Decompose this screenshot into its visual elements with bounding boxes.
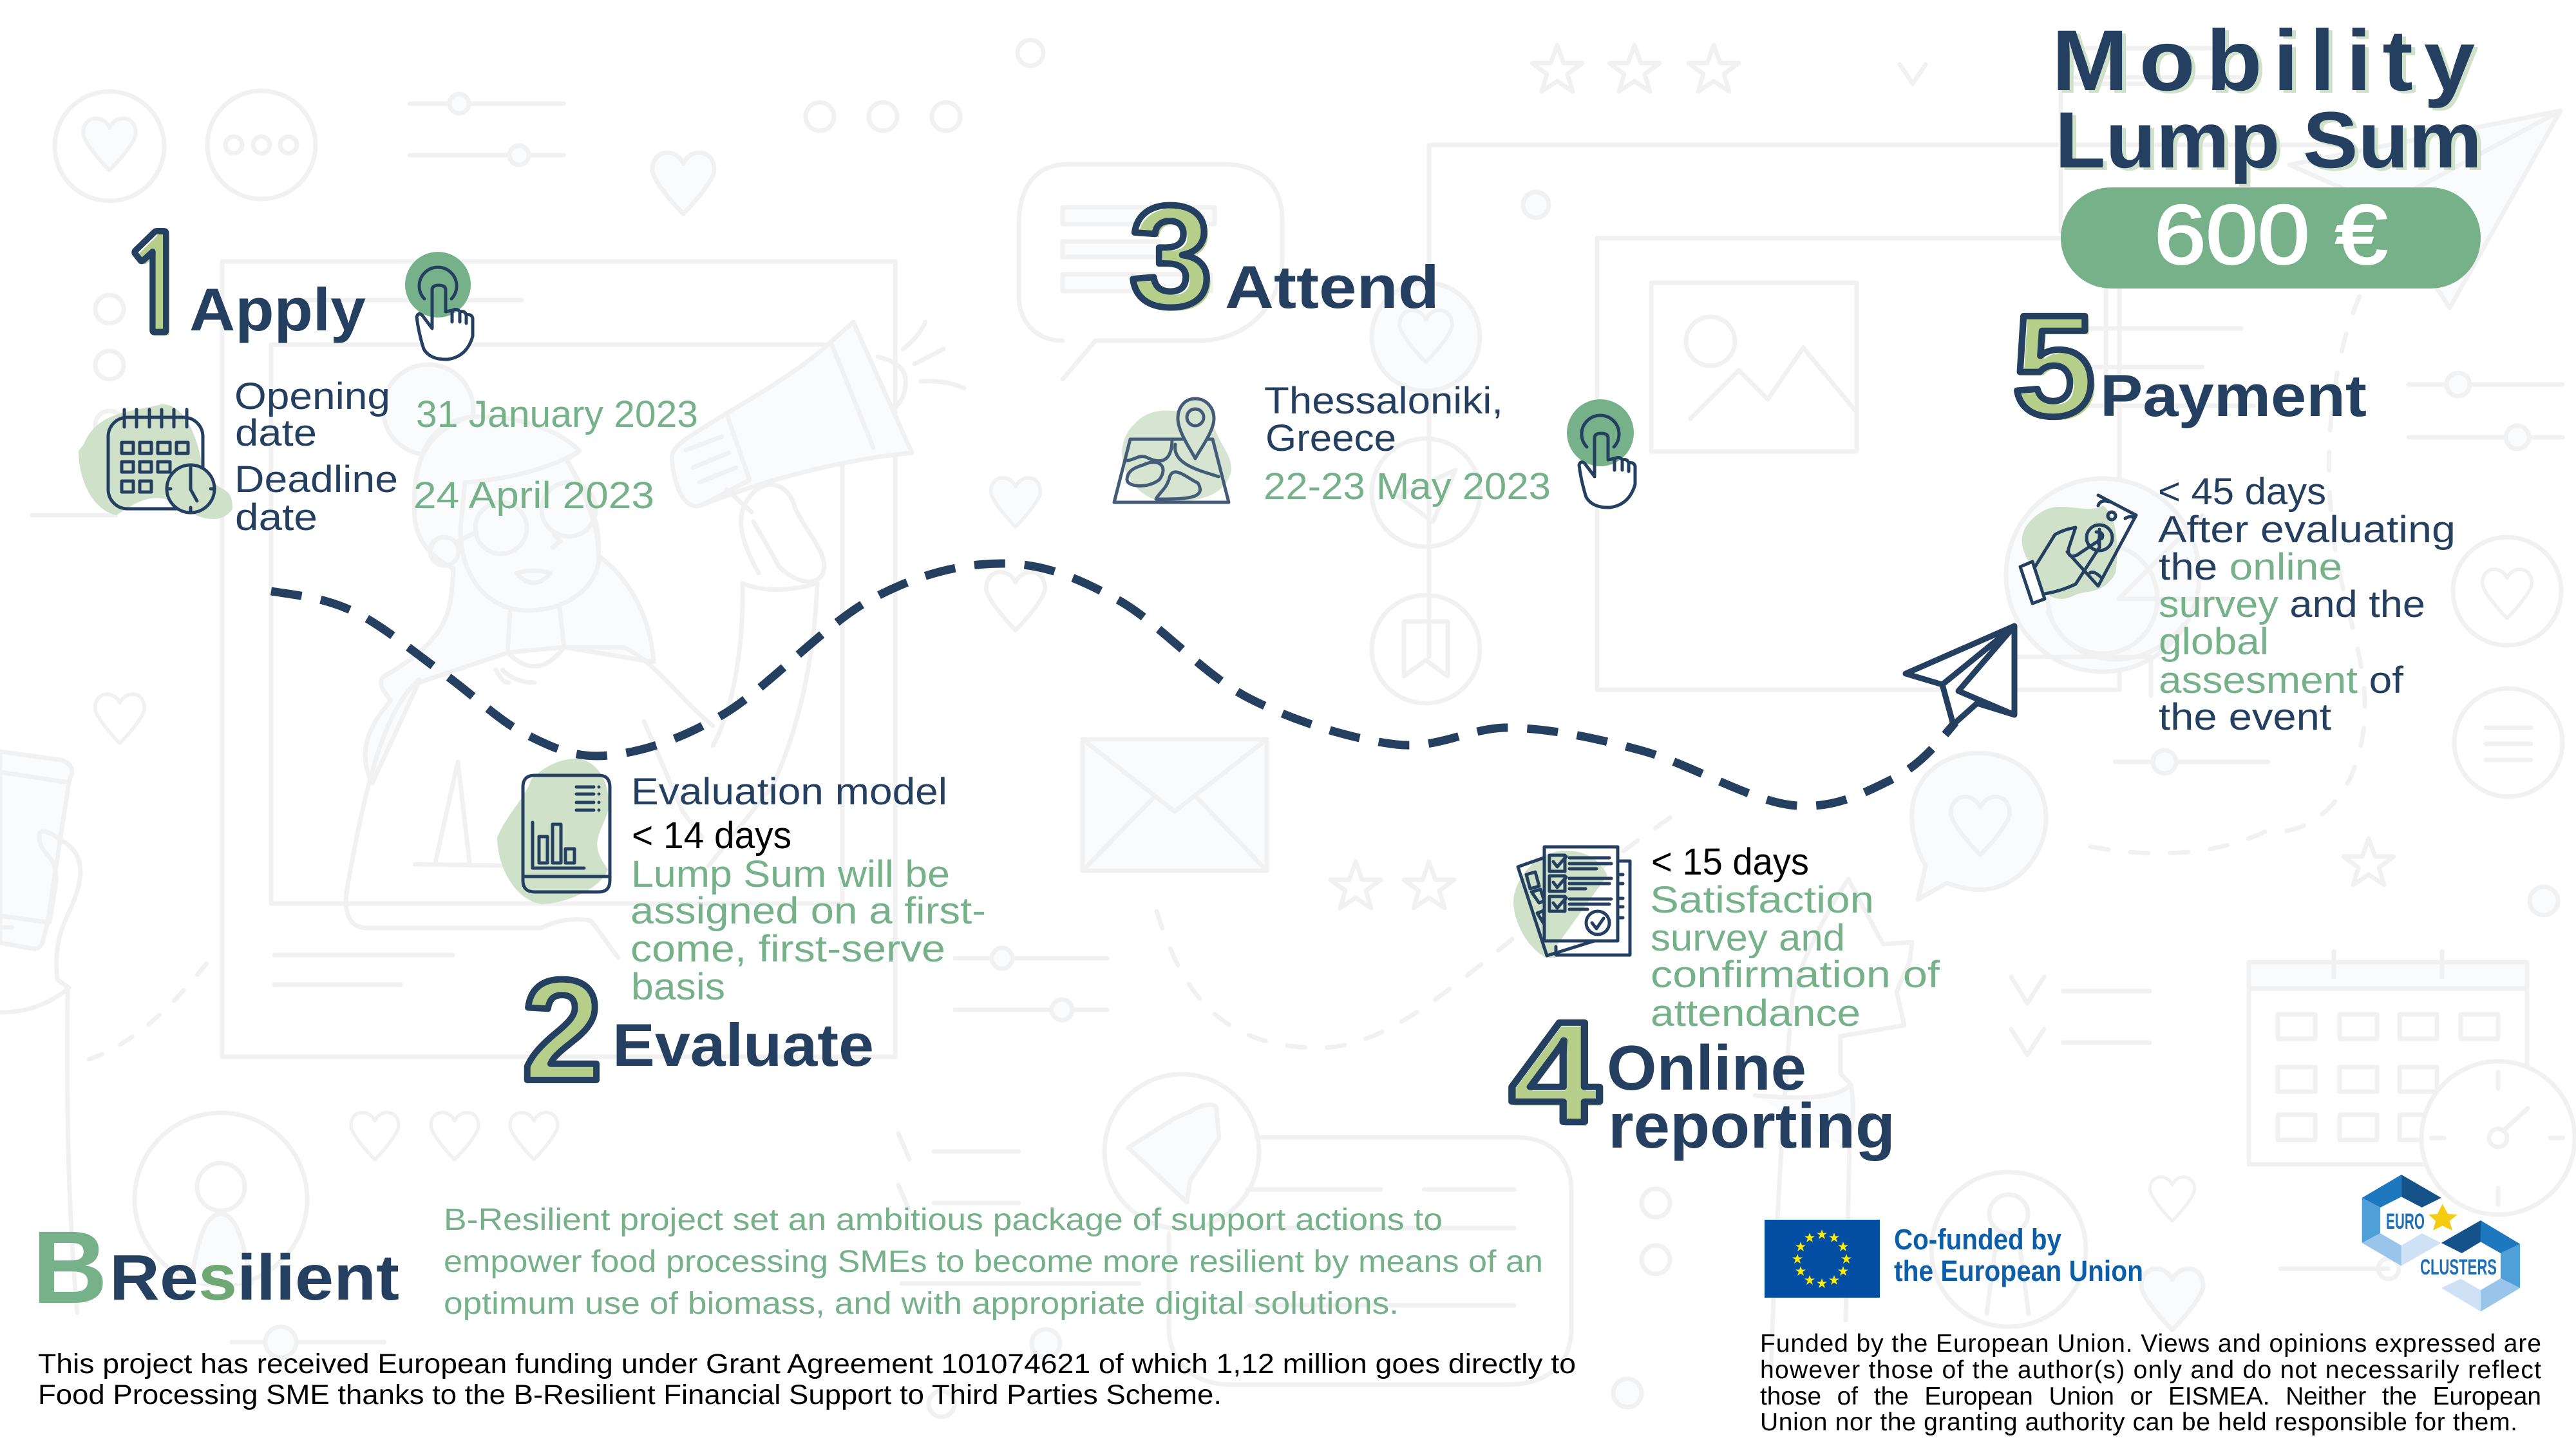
price badge: 600 € bbox=[2061, 187, 2481, 289]
number 3: 3 bbox=[1133, 179, 1216, 340]
number 5: 5 bbox=[2012, 285, 2095, 446]
bubble with heart bbox=[1912, 753, 2046, 900]
text: EU disclaimer bbox=[1760, 1330, 2541, 1436]
icon: hand with banknote bbox=[2020, 495, 2136, 603]
text: deadline date: date bbox=[235, 497, 317, 538]
text: under 45 days and conditions: global bbox=[2159, 621, 2269, 663]
logo: B-Resilient: Resilient bbox=[109, 1242, 399, 1314]
icon: touch button bbox=[1567, 399, 1635, 507]
icon: calendar and clock bbox=[79, 404, 232, 519]
text: funding statement: Food Processing SME thanks to the B-Resilient Financial Support to Third Parties Scheme. bbox=[38, 1379, 1222, 1410]
title: Mobility Lump Sum: Lump Sum bbox=[2055, 96, 2482, 185]
icon: paper plane bbox=[1906, 626, 2014, 724]
icon: touch button bbox=[405, 252, 473, 359]
title: Mobility Lump Sum: Mobility bbox=[2056, 15, 2490, 111]
heading: Evaluate: Evaluate bbox=[612, 1011, 874, 1079]
text: lump sum assignment: assigned on a first- bbox=[630, 890, 986, 932]
top chat bbox=[1063, 207, 1215, 291]
panel: step 2 Evaluate bbox=[497, 759, 986, 1113]
text: location bbox=[1264, 380, 1503, 459]
text: deadline date bbox=[234, 459, 398, 538]
text: EU disclaimer: Union nor the granting authority can be held responsible for them. bbox=[1760, 1408, 2517, 1436]
panel: step 1 Apply bbox=[79, 220, 698, 538]
number 3: 3 bbox=[1130, 176, 1212, 337]
text: under 15 days: < 15 days bbox=[1651, 841, 1809, 883]
text: EU disclaimer: those of the European Union or EISMEA. Neither the European bbox=[1760, 1383, 2541, 1410]
panel: step 3 Attend bbox=[1114, 176, 1635, 507]
logo: Euroclusters: CLUSTERS bbox=[2420, 1255, 2497, 1280]
text: satisfaction survey bbox=[1650, 879, 1940, 1034]
heading: Online reporting: Online bbox=[1607, 1032, 1806, 1103]
text: under 45 days and conditions: survey and the bbox=[2159, 583, 2425, 625]
person bun and hair bbox=[383, 365, 473, 455]
text: deadline date: Deadline bbox=[234, 459, 398, 500]
logo: EU flag co-funded bbox=[1765, 1220, 2143, 1298]
megaphone bbox=[672, 322, 912, 506]
number 5: 5 bbox=[2016, 289, 2099, 450]
dashed journey path bbox=[271, 564, 1955, 806]
text: project description bbox=[444, 1203, 1543, 1321]
text: EU disclaimer: Funded by the European Union. Views and opinions expressed are bbox=[1760, 1330, 2541, 1358]
logo: Euroclusters bbox=[2362, 1175, 2520, 1312]
logo: EU flag co-funded: Co-funded by bbox=[1894, 1223, 2061, 1256]
date: 24 April 2023: 24 April 2023 bbox=[413, 475, 654, 516]
logo: B-Resilient bbox=[32, 1209, 399, 1325]
text: under 45 days and conditions bbox=[2158, 471, 2456, 738]
logo: B-Resilient: B bbox=[32, 1209, 108, 1325]
title: Mobility Lump Sum: Mobility bbox=[2052, 13, 2486, 109]
number 2: 2 bbox=[522, 950, 602, 1111]
number 1: 1 bbox=[118, 220, 194, 352]
heading: Online reporting bbox=[1607, 1032, 1895, 1161]
text: project description: optimum use of biomass, and with appropriate digital solutions. bbox=[444, 1287, 1399, 1321]
text: funding statement bbox=[38, 1349, 1576, 1410]
calendar bbox=[2249, 962, 2527, 989]
text: evaluation model: Evaluation model bbox=[631, 771, 947, 813]
heading: Payment: Payment bbox=[2100, 363, 2367, 429]
icon: report book bbox=[497, 759, 610, 904]
number 4: 4 bbox=[1510, 992, 1600, 1153]
text: EU disclaimer: however those of the author(s) only and do not necessarily reflect bbox=[1760, 1356, 2541, 1384]
price badge: 600 €: 600 € bbox=[2154, 187, 2387, 281]
number 4: 4 bbox=[1511, 996, 1602, 1157]
text: under 45 days and conditions: After evaluating bbox=[2158, 509, 2456, 551]
text: location: Thessaloniki, bbox=[1264, 380, 1503, 422]
text: satisfaction survey: attendance bbox=[1651, 992, 1861, 1034]
bell and chat bbox=[1104, 1074, 1259, 1229]
text: funding statement: This project has received European funding under Grant Agreement 101074621 of which 1,12 million goes directly to bbox=[38, 1349, 1576, 1379]
text: opening date: Opening bbox=[234, 375, 390, 417]
heading: Apply: Apply bbox=[189, 276, 366, 343]
panel: step 5 Payment bbox=[2012, 285, 2456, 738]
text: opening date: date bbox=[235, 412, 317, 454]
logo: Euroclusters: EURO bbox=[2386, 1209, 2425, 1234]
user circle and hearts bbox=[135, 1113, 307, 1285]
text: opening date bbox=[234, 375, 390, 454]
text: under 45 days and conditions: the event bbox=[2159, 696, 2331, 738]
heading: Attend: Attend bbox=[1225, 253, 1439, 321]
title: Mobility Lump Sum bbox=[2052, 13, 2490, 187]
text: under 45 days and conditions: assesment of bbox=[2159, 659, 2404, 701]
text: satisfaction survey: survey and bbox=[1651, 917, 1845, 959]
text: under 45 days and conditions: < 45 days bbox=[2158, 471, 2326, 513]
thumbs hand bbox=[1771, 879, 1912, 1372]
check lists bbox=[2011, 977, 2150, 1055]
date: 22-23 May 2023: 22-23 May 2023 bbox=[1264, 466, 1551, 507]
number 1: 1 bbox=[122, 223, 198, 355]
text: lump sum assignment: Lump Sum will be bbox=[631, 853, 950, 895]
title: Mobility Lump Sum: Lump Sum bbox=[2059, 99, 2486, 187]
text: under 14 days: < 14 days bbox=[632, 815, 791, 857]
text: under 45 days and conditions: the online bbox=[2159, 546, 2342, 588]
phone and hand bbox=[0, 752, 72, 949]
logo: EU flag co-funded: the European Union bbox=[1894, 1255, 2143, 1287]
text: project description: B-Resilient project set an ambitious package of support actions to bbox=[444, 1203, 1443, 1237]
text: satisfaction survey: Satisfaction bbox=[1650, 879, 1874, 921]
text: lump sum assignment: basis bbox=[631, 966, 725, 1008]
text: satisfaction survey: confirmation of bbox=[1651, 954, 1940, 996]
icon: survey documents bbox=[1513, 847, 1630, 958]
text: project description: empower food processing SMEs to become more resilient by means of an bbox=[444, 1245, 1543, 1279]
text: lump sum assignment: come, first-serve bbox=[630, 928, 945, 970]
icon: map with pin bbox=[1114, 399, 1231, 502]
text: location: Greece bbox=[1265, 417, 1396, 459]
number 2: 2 bbox=[525, 952, 605, 1113]
heading: Online reporting: reporting bbox=[1608, 1090, 1895, 1161]
panel: step 4 Online reporting bbox=[1510, 841, 1940, 1161]
date: 31 January 2023: 31 January 2023 bbox=[416, 393, 698, 435]
text: lump sum assignment bbox=[630, 853, 986, 1008]
